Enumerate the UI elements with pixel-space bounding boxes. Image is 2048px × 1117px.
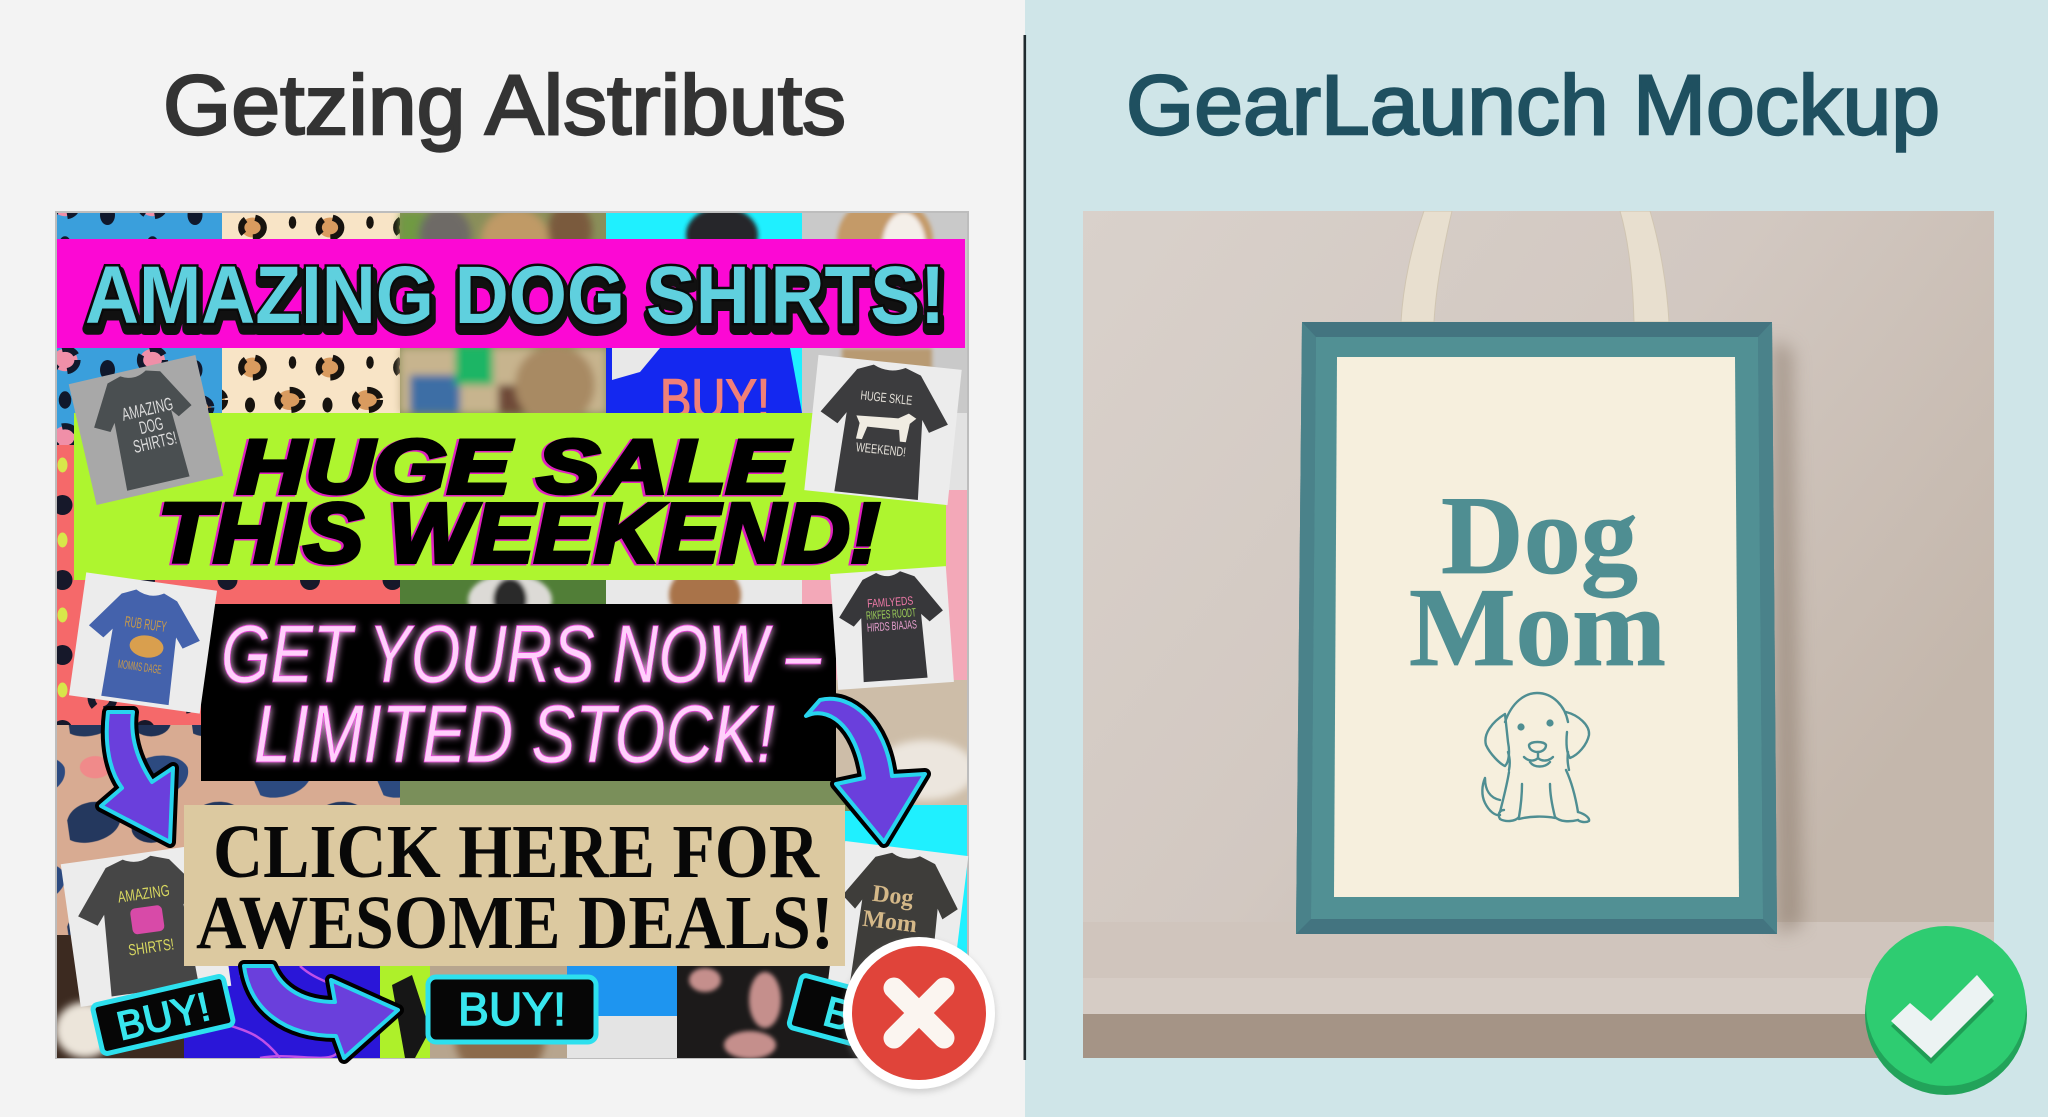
collage background tiles (55, 196, 975, 1080)
banner: huge sale: HUGE SALE (237, 425, 792, 510)
wall (1083, 211, 1994, 923)
button: buy left: BUY! (113, 985, 214, 1049)
arrow: bottom curved purple cyan edge (244, 966, 398, 1058)
t-shirt: dark with colored print: RIKFES RUODT (866, 605, 917, 623)
heading: left title: Getzing Alstributs (163, 58, 846, 152)
banner: huge sale (74, 413, 946, 581)
t-shirt: dog mom dark (828, 841, 968, 999)
t-shirt: amazing shirts yellow: SHIRTS! (127, 936, 175, 960)
poster frame (1296, 322, 1777, 934)
t-shirt: blue with orange print: MOMMS DAGE (117, 657, 162, 677)
heading: right title: GearLaunch Mockup (1126, 58, 1940, 152)
arrow: right curved purple (806, 699, 925, 842)
t-shirt: blue with orange print (69, 572, 217, 714)
panel: cluttered ad collage (55, 196, 975, 1080)
t-shirt: huge sale weekend (804, 355, 962, 505)
button: buy left (92, 976, 234, 1054)
tote handle right (1620, 211, 1669, 322)
t-shirt: amazing dog shirts grey: DOG (137, 413, 165, 438)
button: buy center (428, 977, 596, 1042)
vertical divider (1024, 35, 1026, 1060)
shelf lip (1083, 978, 1871, 1014)
small text: tile buy: BUY! (660, 367, 770, 430)
arrow: left curved purple cyan edge (101, 712, 173, 842)
shelf top (1083, 922, 1994, 978)
badge: green check (1865, 926, 2027, 1095)
frame shadow (1772, 340, 1802, 934)
banner: click here for awesome deals: AWESOME DEALS! (196, 881, 834, 965)
t-shirt: huge sale weekend: WEEKEND! (855, 439, 907, 459)
t-shirt: dark with colored print: HIRDS BIAJAS (866, 617, 917, 635)
panel: clean mockup photo (1081, 209, 1996, 1060)
banner: click here for awesome deals (184, 805, 845, 966)
icon: puppy line drawing (1482, 693, 1589, 822)
arrow: left curved purple (101, 712, 173, 842)
t-shirt: amazing dog shirts grey (69, 355, 223, 505)
poster paper (1334, 357, 1739, 897)
banner: huge sale: THIS WEEKEND! (158, 486, 880, 580)
shelf front (1083, 1014, 1878, 1058)
t-shirt: amazing shirts yellow: AMAZING (117, 882, 171, 907)
banner: neon get yours now: LIMITED STOCK! (254, 689, 775, 780)
t-shirt: blue with orange print: RUB RUFY (124, 613, 168, 636)
banner: huge sale: HUGE SALE (235, 426, 790, 511)
t-shirt: dark with colored print: FAMLYEDS (867, 593, 914, 611)
tote handle left (1401, 211, 1452, 322)
arrow: right curved purple cyan edge (806, 699, 925, 842)
button: buy right (788, 975, 932, 1061)
t-shirt: huge sale weekend: HUGE SKLE (860, 388, 913, 408)
t-shirt: dog mom dark: Dog (871, 881, 915, 912)
t-shirt: amazing shirts yellow (61, 843, 231, 1007)
button: buy center: BUY! (458, 983, 566, 1035)
panel: left background (0, 0, 1025, 1117)
banner: neon get yours now: GET YOURS NOW – (221, 609, 822, 700)
banner: neon get yours now (201, 604, 836, 781)
banner: huge sale: THIS WEEKEND! (156, 487, 878, 581)
t-shirt: amazing dog shirts grey: SHIRTS! (131, 428, 179, 457)
badge: red cross (842, 937, 996, 1093)
arrow: bottom curved purple (244, 966, 398, 1058)
poster text: dog: Dog (1441, 474, 1638, 598)
t-shirt: dog mom dark: Mom (861, 906, 918, 938)
banner: amazing dog shirts: AMAZING DOG SHIRTS! (86, 256, 946, 347)
panel: right background (1025, 0, 2048, 1117)
banner: amazing dog shirts: AMAZING DOG SHIRTS! (85, 250, 945, 341)
banner: click here for awesome deals: CLICK HERE FOR (213, 810, 820, 894)
puppy eyes (1517, 719, 1554, 731)
t-shirt: amazing dog shirts grey: AMAZING (120, 394, 175, 425)
t-shirt: dark with colored print (830, 566, 954, 690)
button: buy right: B (819, 987, 858, 1040)
poster text: mom: Mom (1409, 566, 1666, 690)
